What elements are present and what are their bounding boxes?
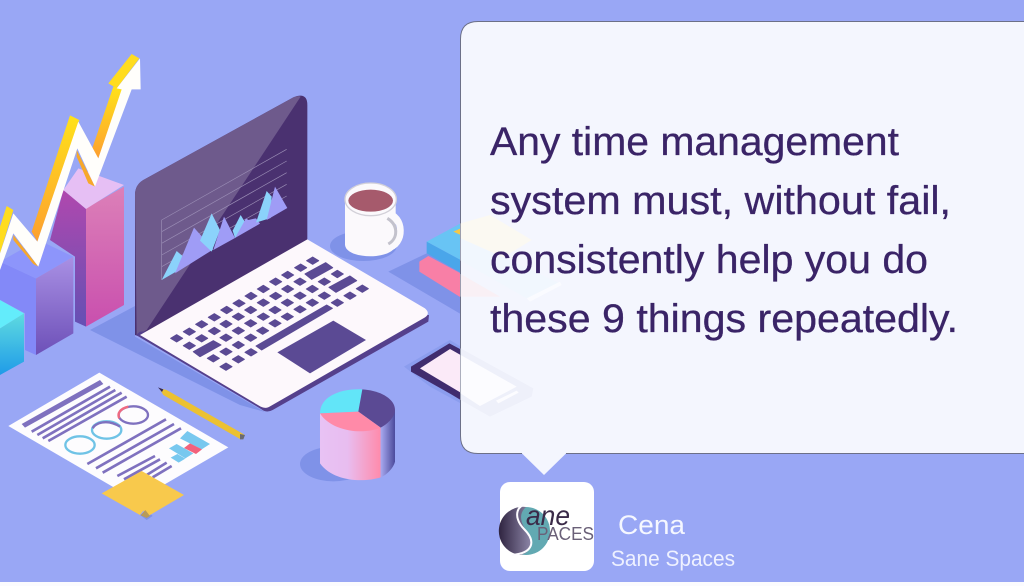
bottom edge strip — [0, 582, 1024, 586]
faded book — [461, 215, 562, 302]
author name: Cena — [618, 510, 686, 540]
laptop lid — [135, 96, 307, 337]
desk items at right — [330, 183, 461, 403]
paper document — [8, 373, 228, 501]
speech bubble — [460, 22, 1024, 475]
quote text: system must, without fail, — [490, 179, 951, 223]
mug shadow — [330, 231, 397, 261]
phone — [411, 343, 461, 400]
keyboard — [171, 257, 368, 370]
pencil — [158, 387, 245, 439]
touchpad — [277, 321, 366, 373]
pink bar — [50, 168, 124, 327]
books shadow — [388, 253, 461, 314]
faded phone — [461, 348, 533, 417]
laptop base edge — [136, 315, 429, 412]
coffee mug — [345, 183, 400, 256]
mini bars — [180, 431, 210, 449]
logo: Sane Spaces — [499, 482, 594, 571]
faded items behind bubble — [461, 215, 562, 417]
pink book — [419, 256, 461, 297]
floor shadow — [90, 306, 265, 412]
document and stationery — [8, 373, 395, 520]
cylinder shadow — [300, 447, 367, 481]
phone shadow — [404, 340, 461, 403]
screen reflection — [135, 96, 301, 335]
progress rings — [65, 406, 148, 454]
quote text: consistently help you do — [490, 238, 928, 282]
screen chart — [162, 149, 287, 280]
cylinder pie chart — [320, 389, 395, 480]
blue bar — [0, 240, 73, 355]
quote text: Any time management — [490, 120, 899, 164]
company name: Sane Spaces — [611, 546, 735, 571]
laptop base — [140, 239, 428, 408]
bar chart with rising arrow — [0, 54, 265, 412]
quote text — [490, 120, 958, 341]
logo: Sane Spaces: ane — [526, 500, 570, 531]
cyan bar — [0, 300, 24, 375]
sticky note — [102, 471, 184, 520]
laptop — [135, 96, 429, 412]
arrow — [0, 54, 141, 270]
blue book — [427, 223, 461, 273]
quote text: these 9 things repeatedly. — [490, 297, 958, 341]
logo: Sane Spaces: PACES — [537, 524, 594, 544]
